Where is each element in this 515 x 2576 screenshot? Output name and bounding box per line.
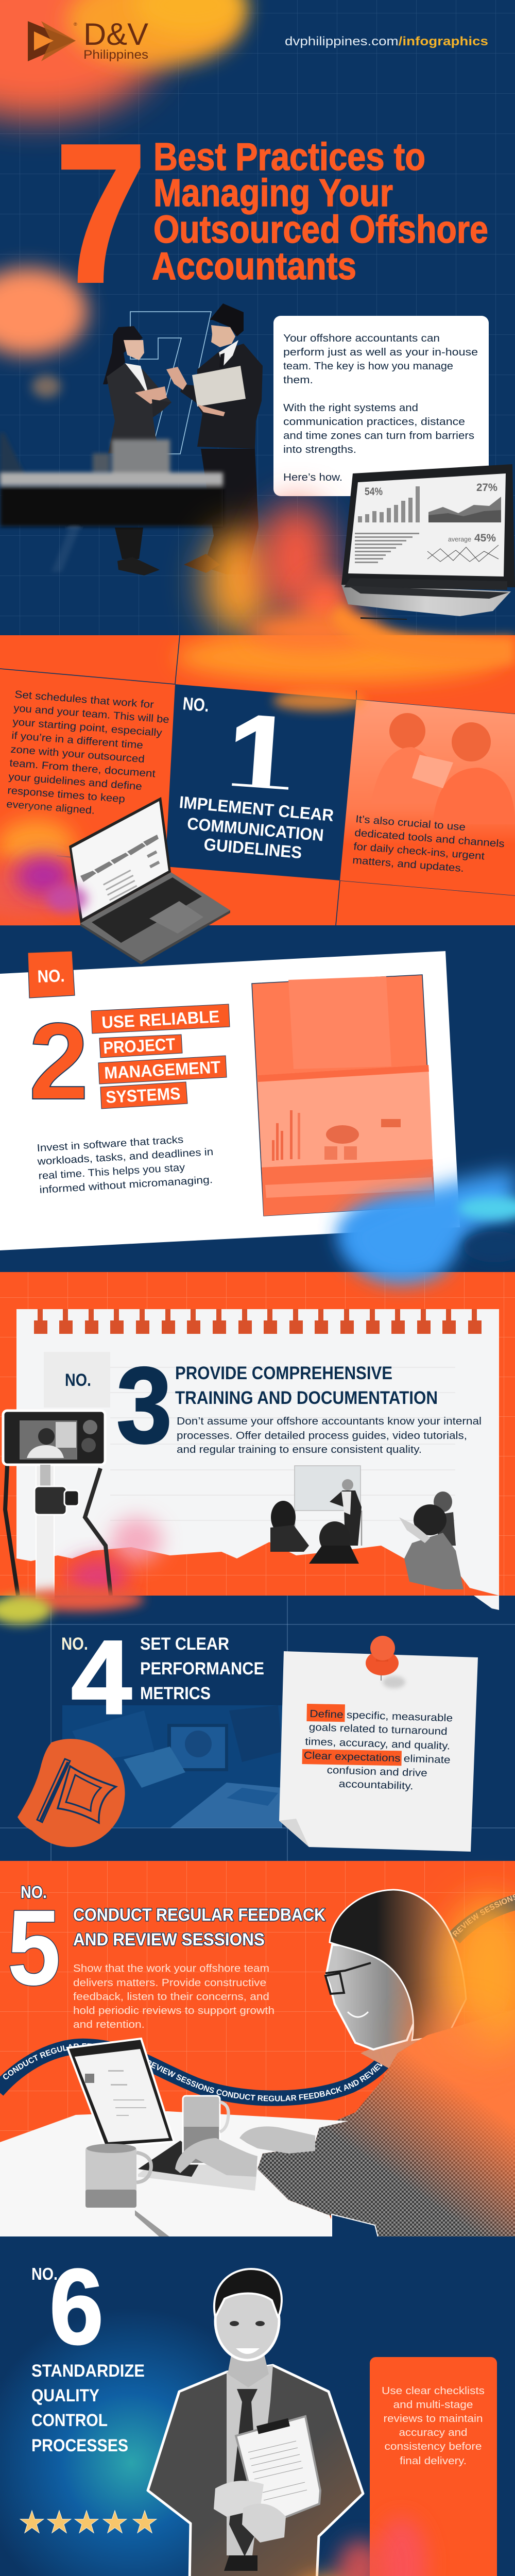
- section 5 body text: Show that the work your offshore team: [73, 1963, 269, 1974]
- people: woman: [103, 326, 171, 575]
- sticky note: confusion and drive: [327, 1765, 427, 1779]
- section 1 left text: Set schedules that work for: [14, 689, 154, 710]
- top left gradient glow: [0, 0, 247, 118]
- section 6 heading: PROCESSES: [31, 2436, 128, 2455]
- section 2 heading labels: SYSTEMS: [105, 1083, 181, 1107]
- section 2 number badge: [28, 951, 75, 998]
- section 5 heading: AND REVIEW SESSIONS: [73, 1930, 265, 1950]
- intro card: them.: [283, 375, 313, 386]
- section 3 torn orange edge: [16, 1542, 499, 1596]
- section 5 heading: 5: [7, 1888, 61, 2008]
- section 1 number and heading: 1: [222, 689, 298, 825]
- camera on tripod: [3, 1411, 111, 1599]
- section 3 corner curl: [474, 1596, 499, 1610]
- section 1 number and heading: COMMUNICATION: [186, 814, 324, 845]
- section 1 number and heading: IMPLEMENT CLEAR: [178, 792, 335, 825]
- section 1 left text: zone with your outsourced: [10, 744, 145, 765]
- blurred desk: [0, 439, 223, 572]
- section 5 heading: [7, 1883, 325, 2008]
- section 6 heading: CONTROL: [31, 2411, 108, 2430]
- man with clipboard: [148, 2269, 363, 2576]
- hands: [175, 2126, 315, 2177]
- section 1 left text: everyone aligned.: [6, 799, 95, 817]
- title: Accountants: [152, 244, 356, 287]
- section 2 photo: [252, 975, 435, 1216]
- flag sticker: [18, 1739, 125, 1847]
- logo: ®: [74, 22, 77, 27]
- intro card: and time zones can turn from barriers: [283, 430, 474, 442]
- title: Best Practices to: [153, 135, 425, 178]
- section 6 orange card: and multi-stage: [393, 2399, 473, 2411]
- section 1 divider lines: [0, 635, 515, 925]
- section 1 photo panel: [340, 700, 515, 895]
- section 1 navy panel: [165, 684, 356, 880]
- section 5 glow: [407, 1896, 515, 2066]
- section 6 heading: NO.: [31, 2264, 58, 2283]
- section 6 orange card: reviews to maintain: [383, 2413, 483, 2425]
- section 5 body text: feedback, listen to their concerns, and: [73, 1991, 269, 2003]
- title: [56, 103, 488, 323]
- section 1 left text: response times to keep: [7, 785, 126, 805]
- section 5 body text: and retention.: [73, 2019, 145, 2030]
- front mug: [85, 2144, 151, 2208]
- sticky note: times, accuracy, and quality.: [305, 1736, 450, 1752]
- woman head: [325, 1890, 466, 2071]
- intro card: With the right systems and: [283, 402, 418, 414]
- section 1 left text: [6, 689, 170, 822]
- section 5 body text: delivers matters. Provide constructive: [73, 1977, 266, 1989]
- section 3 number: 3: [116, 1345, 172, 1466]
- people: man: [166, 303, 263, 574]
- bottom hero glow: [203, 502, 350, 636]
- section 6 orange card: consistency before: [384, 2441, 482, 2452]
- section 4 heading: 4: [71, 1619, 132, 1736]
- section 1 left blob: [0, 819, 77, 920]
- orange fade over panel edge: [273, 690, 366, 711]
- ribbon lower: [0, 2038, 388, 2106]
- section 4 heading: SET CLEAR: [140, 1634, 229, 1654]
- logo: D&V: [83, 17, 148, 52]
- intro card: team. The key is how you manage: [283, 361, 453, 372]
- hero laptop with charts: [341, 464, 515, 620]
- section 3 body text: [177, 1416, 482, 1455]
- title: 7: [56, 103, 146, 323]
- section 4 heading: NO.: [61, 1634, 88, 1654]
- bottom left colourful glow: [0, 1588, 144, 1624]
- sticky note: Clear expectations eliminate: [303, 1750, 451, 1766]
- section 6 heading: QUALITY: [31, 2386, 99, 2405]
- ribbon lower: CONDUCT REGULAR FEEDBACK AND REVIEW SESSIONS CONDUCT REGULAR FEEDBACK AND REVIEW SESSIONS: [3, 2043, 383, 2102]
- section 1 right text: for daily check-ins, urgent: [353, 841, 485, 862]
- section 5 laptop: [67, 2039, 258, 2191]
- section 3 notepad: [16, 1309, 499, 1596]
- section 4 photo: [62, 1705, 282, 1828]
- intro card: into strengths.: [283, 444, 356, 455]
- section 6 heading: 6: [49, 2247, 104, 2367]
- hero laptop with charts: 54%: [365, 486, 383, 498]
- website url: dvphilippines.com /infographics: [285, 35, 488, 48]
- section 2 number badge: NO.: [37, 966, 65, 987]
- section 3 heading: [175, 1363, 438, 1408]
- section 2 text: real time. This helps you stay: [38, 1162, 185, 1182]
- section 4 heading: [61, 1619, 264, 1736]
- section 6 heading: STANDARDIZE: [31, 2361, 145, 2381]
- section 6 orange card: accuracy and: [399, 2427, 468, 2438]
- section 1 left text: you and your team. This will be: [13, 703, 169, 725]
- left salmon blur: [0, 268, 88, 482]
- desk: [0, 2111, 378, 2237]
- intro card: communication practices, distance: [283, 416, 465, 428]
- section 6 heading: [31, 2247, 145, 2455]
- section 1 left text: team. From there, document: [9, 757, 156, 779]
- logo: [28, 17, 148, 62]
- section 1 left text: your starting point, especially: [12, 716, 162, 739]
- section 4 grid lines: [0, 1596, 515, 1861]
- intro card: Your offshore accountants can: [283, 333, 440, 344]
- section 2 text: workloads, tasks, and deadlines in: [37, 1146, 214, 1167]
- section 2 heading labels: PROJECT: [102, 1035, 176, 1057]
- section 2 white paper: [0, 951, 460, 1250]
- logo: Philippines: [83, 48, 148, 62]
- sweater person: [258, 2009, 515, 2237]
- section 3 body text: and regular training to ensure consistent quality.: [177, 1444, 422, 1455]
- section 6 orange card: [370, 2357, 497, 2576]
- section 2 text: Invest in software that tracks: [37, 1134, 184, 1154]
- hero laptop with charts: 27%: [476, 482, 497, 494]
- section 3 note: NO.: [65, 1370, 91, 1390]
- section 3 body text: processes. Offer detailed process guides, video tutorials,: [177, 1430, 467, 1442]
- section 3 note: [44, 1352, 110, 1408]
- section 1 right text: [352, 814, 506, 877]
- sticky note: [279, 1651, 478, 1852]
- hero laptop with charts: average: [448, 535, 471, 543]
- hero laptop with charts: 45%: [474, 532, 496, 544]
- section 2 text: informed without micromanaging.: [39, 1174, 213, 1196]
- section 2 big number: 2: [29, 1000, 89, 1122]
- section 3 heading: PROVIDE COMPREHENSIVE: [175, 1363, 392, 1383]
- section 2 heading labels: USE RELIABLE: [101, 1007, 220, 1032]
- macbook blob overlay: [46, 885, 88, 913]
- section 4 heading: METRICS: [140, 1684, 211, 1703]
- intro card: Here’s how.: [283, 472, 342, 483]
- back mug: [183, 2096, 229, 2164]
- section 1 number and heading: [178, 689, 335, 862]
- section 6 orange card: final delivery.: [400, 2455, 467, 2467]
- section 3 training scene: [270, 1466, 464, 1589]
- section 6 orange card: Use clear checklists: [382, 2385, 485, 2397]
- push pin: [366, 1636, 405, 1688]
- section 5 body text: hold periodic reviews to support growth: [73, 2005, 274, 2016]
- section 2 text: [37, 1134, 214, 1196]
- macbook: [69, 797, 230, 964]
- section 2 heading labels: MANAGEMENT: [104, 1057, 221, 1082]
- title: Managing Your: [153, 171, 393, 214]
- section 6 bottom glow: [288, 2540, 384, 2576]
- section 1 left text: your guidelines and define: [8, 771, 143, 792]
- section 5 heading: CONDUCT REGULAR FEEDBACK: [73, 1905, 325, 1925]
- section 3 body text: Don’t assume your offshore accountants know your internal: [177, 1416, 482, 1427]
- section 1 right text: It’s also crucial to use: [355, 814, 466, 833]
- outlined seven behind people: [130, 312, 211, 454]
- intro card: perform just as well as your in-house: [283, 347, 478, 358]
- section 3 heading: TRAINING AND DOCUMENTATION: [175, 1388, 438, 1408]
- section 2 heading labels: [91, 1004, 230, 1109]
- section 1 right text: matters, and updates.: [352, 855, 465, 874]
- five star rating: [20, 2511, 157, 2533]
- section 4 heading: PERFORMANCE: [140, 1659, 264, 1679]
- section 5 body text: [73, 1963, 274, 2030]
- section 1 number and heading: NO.: [182, 693, 210, 716]
- sticky note: Define specific, measurable: [310, 1708, 453, 1724]
- intro card: [273, 316, 489, 496]
- section 5 heading: NO.: [21, 1883, 47, 1902]
- section 6 glow: [0, 2236, 515, 2576]
- section 1 right text: dedicated tools and channels: [354, 827, 505, 850]
- section 1 top glow: [175, 631, 505, 683]
- section 1 left text: if you’re in a different time: [11, 730, 144, 751]
- sticky note: accountability.: [338, 1778, 414, 1792]
- section 1 number and heading: GUIDELINES: [203, 835, 303, 862]
- sticky note: goals related to turnaround: [308, 1722, 448, 1737]
- section 2/3 blue glow: [340, 1170, 515, 1282]
- section 3 pink glow: [67, 1517, 162, 1595]
